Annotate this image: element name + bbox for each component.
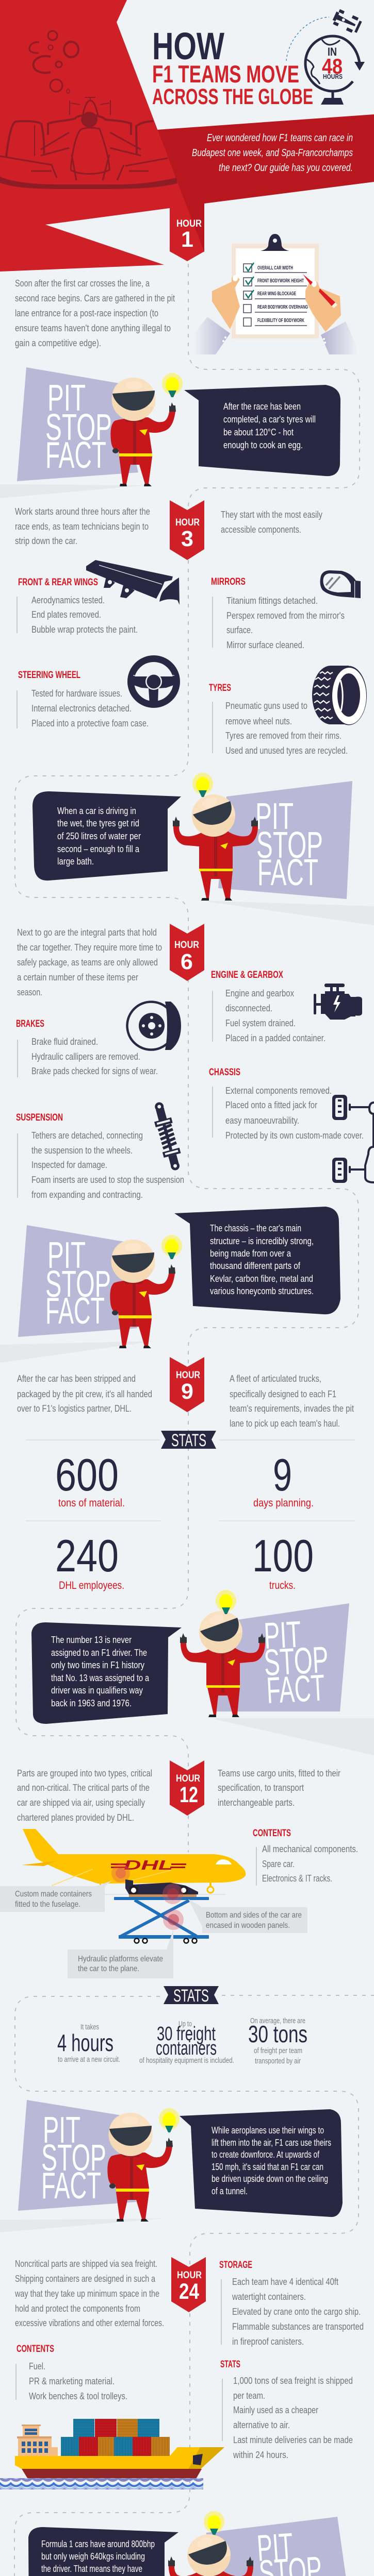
item: sea freight stats: alternative to air.	[233, 2419, 290, 2430]
item: suspension: SUSPENSION	[16, 1112, 63, 1123]
hour 6 badge	[170, 924, 204, 981]
item: chassis: Placed onto a fitted jack for	[225, 1099, 317, 1110]
hour 12 badge: 12	[180, 1783, 198, 1807]
hour 9 text left	[17, 1373, 152, 1414]
stat: 100 trucks: 100	[252, 1530, 314, 1581]
item: suspension	[16, 1112, 184, 1200]
item: storage: STORAGE	[219, 2260, 252, 2270]
hour 3 text left: Work starts around three hours after the	[15, 506, 150, 517]
hour 3 text right: accessible components.	[221, 524, 301, 535]
icon: mirror	[320, 570, 361, 598]
hour 12 text left: car are shipped via air, using specially	[17, 1797, 145, 1808]
item: engine and gearbox	[211, 970, 326, 1043]
hour 3 text right: They start with the most easily	[221, 509, 323, 520]
stat: 4 hours: It takes	[80, 2023, 99, 2031]
hour 1 text	[15, 278, 175, 348]
hour 1 label	[176, 218, 202, 252]
item: air cargo contents: CONTENTS	[253, 1828, 291, 1839]
stat: 30 tons: 30 tons	[248, 2021, 307, 2047]
item: sea freight stats: STATS	[220, 2359, 240, 2370]
icon: steering wheel	[131, 658, 176, 705]
hour 6 badge: HOUR	[174, 940, 199, 951]
item: storage: watertight containers.	[232, 2291, 306, 2302]
hour 6 text: season.	[17, 987, 42, 997]
hour 12 text left: and non-critical. The critical parts of the	[17, 1782, 150, 1793]
pit stop fact 6: the driver. That means they have	[41, 2564, 142, 2574]
item: brakes: Brake pads checked for signs of wear.	[31, 1065, 158, 1076]
pit stop fact 3: FACT	[45, 1291, 105, 1332]
item: front and rear wings: End plates removed.	[31, 609, 101, 620]
pit stop fact 1: STOP	[45, 407, 112, 448]
item: storage: in fireproof canisters.	[232, 2336, 304, 2347]
hour 1 label: 1	[181, 227, 193, 252]
hour 9 text left: over to F1's logistics partner, DHL.	[17, 1403, 132, 1414]
item: sea freight stats: per team.	[233, 2390, 265, 2401]
hour 6 badge: 6	[181, 950, 193, 974]
item: suspension: the suspension to the wheels.	[31, 1145, 133, 1156]
item: front and rear wings: Bubble wrap protects the paint.	[31, 624, 138, 635]
stat: 30 tons: of freight per team	[254, 2046, 302, 2055]
hour 12 text left: Parts are grouped into two types, critical	[17, 1768, 152, 1778]
hour 9 badge	[170, 1357, 204, 1412]
hour 12 badge: HOUR	[176, 1773, 200, 1784]
pit stop fact 2: STOP	[256, 825, 323, 866]
illustration: scrutineering clipboard held in hands: REAR BODYWORK OVERHANG	[257, 304, 308, 310]
hour 3 text left: strip down the car.	[15, 535, 77, 546]
pit stop fact 5: FACT	[41, 2165, 101, 2207]
pit stop fact 1: PIT	[47, 378, 86, 419]
item: front and rear wings: FRONT & REAR WINGS	[18, 577, 98, 588]
item: brakes: BRAKES	[16, 1019, 44, 1029]
pit stop fact 1: completed, a car's tyres will	[223, 414, 316, 425]
pit stop fact 5: to create downforce. At upwards of	[212, 2149, 320, 2160]
item: tyres: remove wheel nuts.	[225, 716, 292, 726]
stat: 30 freight containers: of hospitality equipment is included.	[139, 2056, 234, 2065]
hour 24 badge	[171, 2257, 206, 2312]
illustration: scrutineering clipboard held in hands: OVERALL CAR WIDTH	[257, 265, 293, 271]
item: sea freight stats	[220, 2359, 353, 2460]
pit stop fact 2: PIT	[255, 796, 294, 837]
item: sea freight stats: within 24 hours.	[233, 2449, 288, 2460]
stat: 30 tons: On average, there are	[250, 2016, 305, 2025]
hour 1 text: lane entrance for a post-race inspection (to	[15, 308, 158, 318]
item: steering wheel: Internal electronics detached.	[31, 703, 132, 714]
icon: globe with 48 hours: 48	[322, 54, 343, 78]
item: suspension: from expanding and contracting.	[31, 1189, 143, 1200]
item: suspension: Tethers are detached, connecting	[31, 1130, 143, 1141]
hour 12 text right	[218, 1768, 340, 1808]
hour 9 badge: 9	[181, 1379, 193, 1404]
pit stop fact 1	[0, 367, 340, 498]
pit stop fact 4: driver was in qualifiers way	[51, 1685, 143, 1696]
callout: wooden panels	[188, 1899, 307, 1933]
hour 12 text left	[17, 1768, 152, 1823]
hour 1 text: gain a competitive edge).	[15, 337, 101, 348]
callout: containers	[0, 1880, 112, 1912]
icon: suspension spring	[150, 1100, 185, 1173]
illustration: DHL cargo plane and scissor lift: DHL	[124, 1857, 173, 1873]
header: dark ribbon	[156, 114, 374, 252]
pit stop fact 2: When a car is driving in	[57, 806, 136, 816]
item: air cargo contents: Electronics & IT racks.	[262, 1873, 332, 1884]
pit stop fact 5: lift them into the air, F1 cars use theirs	[212, 2138, 331, 2148]
item: front and rear wings: Aerodynamics tested.	[31, 595, 105, 605]
stat: 30 tons	[248, 2016, 307, 2065]
hour 24 badge: HOUR	[177, 2270, 202, 2281]
hour 6 text: the car together. They require more time to	[17, 942, 162, 953]
stat: 30 tons: transported by air	[255, 2057, 301, 2065]
pit stop fact 6	[28, 2511, 374, 2576]
hour 3 badge: HOUR	[175, 517, 200, 528]
item: tyres	[209, 683, 348, 756]
item: chassis: External components removed.	[225, 1085, 332, 1096]
pit stop fact 5: STOP	[41, 2138, 106, 2179]
pit stop fact 3: Kevlar, carbon fibre, metal and	[210, 1274, 313, 1284]
hour 9 text right: specifically designed to each F1	[230, 1388, 336, 1399]
item: brakes: Hydraulic callipers are removed.	[31, 1051, 140, 1062]
hour 12 text right: Teams use cargo units, fitted to their	[218, 1768, 340, 1778]
pit stop fact 5	[0, 2100, 343, 2232]
hour 3 text left	[15, 506, 150, 546]
hour 9 text right	[230, 1373, 354, 1429]
stat: 9 days	[253, 1449, 314, 1509]
hour 9 badge: HOUR	[176, 1370, 200, 1381]
hour 24 text: excessive vibrations and other external forces.	[15, 2317, 164, 2328]
stat: 9 days: 9	[273, 1449, 292, 1500]
pit stop fact 1: FACT	[45, 435, 106, 476]
hour 1 text: second race begins. Cars are gathered in the pit	[15, 293, 175, 303]
stat: 600 tons: tons of material.	[58, 1497, 125, 1509]
pit stop fact 6: but only weigh 640kgs including	[41, 2551, 145, 2562]
item: engine and gearbox: Engine and gearbox	[225, 988, 295, 998]
pit stop fact 4: The number 13 is never	[51, 1635, 132, 1645]
callout: wooden panels: Bottom and sides of the car are	[206, 1911, 302, 1920]
hour 6 text: Next to go are the integral parts that hold	[17, 927, 157, 938]
illustration: scrutineering clipboard held in hands	[193, 234, 358, 354]
icon: wing	[86, 560, 180, 605]
stat: 4 hours: to arrive at a new circuit.	[58, 2055, 120, 2064]
pit stop fact 1: enough to cook an egg.	[223, 440, 303, 450]
pit stop fact 2: large bath.	[57, 856, 94, 867]
pit stop fact 3: PIT	[47, 1235, 86, 1276]
item: sea cargo contents	[15, 2344, 127, 2401]
pit stop fact 1: After the race has been	[223, 401, 301, 412]
hour 12 text right: specification, to transport	[218, 1782, 304, 1793]
icon: F1 car silhouette with smoke bubbles	[0, 31, 177, 189]
hour 24 text: way that they take up minimum space in the	[14, 2288, 159, 2299]
stat: 4 hours: 4 hours	[57, 2029, 113, 2056]
hour 6 text: safely package, as teams are only allowed	[17, 957, 158, 968]
hour 24 badge: 24	[179, 2279, 199, 2304]
header: red panel with hour 1 badge	[0, 0, 204, 272]
hour 3 badge	[170, 500, 204, 560]
pit stop fact 3	[0, 1207, 340, 1363]
item: sea cargo contents: CONTENTS	[17, 2344, 54, 2354]
stat: 9 days: days planning.	[253, 1497, 314, 1509]
item: steering wheel	[17, 670, 149, 728]
pit stop fact 4: that No. 13 was assigned to a	[51, 1673, 150, 1683]
icon: engine	[314, 984, 362, 1020]
stat: 240 employees: 240	[55, 1530, 119, 1581]
item: suspension: Inspected for damage.	[31, 1159, 107, 1170]
hour 3 text right	[221, 509, 323, 535]
icon: globe with 48 hours: IN	[328, 45, 337, 58]
pit stop fact 5: While aeroplanes use their wings to	[212, 2125, 324, 2136]
icon: brake disc	[127, 1002, 181, 1050]
item: brakes	[16, 1019, 158, 1077]
item: air cargo contents	[253, 1828, 358, 1886]
item: steering wheel: STEERING WHEEL	[18, 670, 80, 681]
item: tyres: Tyres are removed from their rims.	[225, 730, 342, 741]
icon: globe with 48 hours: HOURS	[323, 73, 343, 80]
hour 3 badge: 3	[181, 527, 193, 551]
callout: containers: fitted to the fuselage.	[15, 1900, 80, 1909]
icon: tyre	[312, 666, 367, 725]
item: chassis	[209, 1067, 364, 1141]
callout: wooden panels: encased in wooden panels.	[206, 1921, 290, 1930]
hour 9 text left: After the car has been stripped and	[17, 1373, 136, 1384]
illustration: container ship side view	[0, 2419, 224, 2489]
hour 24 text: hold and protect the components from	[15, 2303, 140, 2314]
title: HOW	[152, 25, 224, 67]
item: tyres: TYRES	[209, 683, 231, 693]
stat: 30 freight containers: 30 freight	[157, 2023, 216, 2045]
item: steering wheel: Placed into a protective foam case.	[31, 718, 149, 728]
item: mirrors	[211, 577, 345, 650]
hour 1 label: HOUR	[176, 218, 202, 229]
pit stop fact 2: FACT	[257, 852, 318, 893]
pit stop fact 3: thousand different parts of	[210, 1261, 301, 1271]
stat: 30 freight containers	[139, 2020, 234, 2065]
pit stop fact 3: structure – is incredibly strong,	[210, 1236, 314, 1246]
item: chassis: easy manoeuvrability.	[225, 1115, 299, 1126]
hour 9 text right: A fleet of articulated trucks,	[230, 1373, 321, 1384]
stat: 100 trucks	[252, 1530, 314, 1591]
pit stop fact 6: Formula 1 cars have around 800bhp	[41, 2539, 155, 2549]
pit stop fact 5: PIT	[43, 2110, 80, 2151]
pit stop fact 6: PIT	[256, 2526, 295, 2569]
item: mirrors: surface.	[226, 624, 253, 635]
pit stop fact 4: STOP	[263, 1639, 330, 1684]
item: mirrors: Mirror surface cleaned.	[226, 639, 304, 650]
stat: 600 tons: 600	[55, 1449, 119, 1500]
pit stop fact 4: PIT	[263, 1614, 302, 1657]
callout: hydraulic platforms: the car to the plane.	[78, 1964, 139, 1973]
callout: hydraulic platforms	[68, 1929, 173, 1978]
hour 12 badge	[170, 1760, 204, 1816]
icon: top-down F1 car	[331, 8, 363, 35]
pit stop fact 4: only two times in F1 history	[51, 1660, 144, 1670]
stat: 240 employees: DHL employees.	[59, 1580, 124, 1591]
pit stop fact 3: various honeycomb structures.	[210, 1286, 314, 1296]
title	[152, 25, 313, 109]
item: air cargo contents: Spare car.	[262, 1858, 295, 1869]
title: F1 TEAMS MOVE	[152, 60, 299, 88]
pit stop fact 4: back in 1963 and 1976.	[51, 1698, 132, 1708]
item: mirrors: Perspex removed from the mirror's	[226, 610, 345, 621]
hour 1 text: Soon after the first car crosses the line, a	[15, 278, 150, 289]
item: engine and gearbox: disconnected.	[225, 1003, 272, 1013]
pit stop fact 4	[31, 1590, 374, 1755]
pit stop fact 3: being made from over a	[210, 1248, 291, 1259]
pit stop fact 4: assigned to an F1 driver. The	[51, 1648, 147, 1658]
item: mirrors: MIRRORS	[211, 577, 246, 587]
hour 24 text: Shipping containers are designed in such a	[15, 2273, 156, 2284]
hour 12 text right: interchangeable parts.	[218, 1797, 295, 1808]
intro text	[192, 132, 353, 174]
pit stop fact 4: FACT	[266, 1667, 326, 1711]
item: mirrors: Titanium fittings detached.	[226, 595, 318, 606]
pit stop fact 5: 150 mph, it's said that an F1 car can	[212, 2162, 323, 2172]
callout: hydraulic platforms: Hydraulic platforms elevate	[78, 1955, 163, 1963]
pit stop fact 2: the wet, the tyres get rid	[57, 818, 139, 828]
item: steering wheel: Tested for hardware issues.	[31, 688, 122, 699]
hour 12 text left: chartered planes provided by DHL.	[17, 1812, 134, 1823]
pit stop fact 5: be driven upside down on the ceiling	[212, 2174, 328, 2184]
pit stop fact 2: of 250 litres of water per	[57, 831, 141, 841]
hour 3 text left: race ends, as team technicians begin to	[15, 521, 149, 532]
item: sea freight stats: Mainly used as a cheaper	[233, 2404, 318, 2415]
stat: 4 hours	[57, 2023, 120, 2064]
pit stop fact 3: The chassis – the car's main	[210, 1223, 301, 1233]
illustration: DHL cargo plane and scissor lift	[22, 1829, 246, 1943]
hour 24 text: Noncritical parts are shipped via sea freight.	[15, 2258, 157, 2269]
stat: 100 trucks: trucks.	[269, 1580, 296, 1591]
illustration: scrutineering clipboard held in hands: REAR WING BLOCKAGE	[257, 291, 296, 297]
stats ribbon 1: STATS	[171, 1431, 206, 1450]
item: suspension: Foam inserts are used to stop the suspension	[31, 1174, 184, 1185]
pit stop fact 2	[32, 773, 374, 925]
hour 24 text	[14, 2258, 164, 2328]
item: chassis: CHASSIS	[209, 1067, 240, 1078]
pit stop fact 1: be about 120°C - hot	[223, 427, 294, 437]
item: sea cargo contents: Work benches & tool trolleys.	[29, 2391, 127, 2401]
stats ribbon 1	[161, 1431, 216, 1450]
pit stop fact 3: STOP	[45, 1264, 111, 1305]
pit stop fact 5: of a tunnel.	[212, 2186, 248, 2196]
callout: containers: Custom made containers	[15, 1890, 92, 1899]
item: front and rear wings	[17, 577, 138, 635]
hour 9 text left: packaged by the pit crew, it's all handed	[17, 1388, 152, 1399]
item: tyres: Pneumatic guns used to	[225, 700, 307, 711]
item: sea cargo contents: Fuel.	[29, 2361, 45, 2371]
stat: 30 freight containers: Up to	[178, 2020, 192, 2028]
item: engine and gearbox: ENGINE & GEARBOX	[211, 970, 283, 980]
item: engine and gearbox: Placed in a padded container.	[225, 1032, 326, 1043]
item: storage: Each team have 4 identical 40ft	[232, 2276, 338, 2287]
illustration: scrutineering clipboard held in hands: FRONT BODYWORK HEIGHT	[257, 278, 304, 284]
icon: globe with 48 hours	[286, 17, 365, 105]
hour 6 text	[17, 927, 162, 997]
item: storage	[219, 2260, 364, 2347]
pit stop fact 2: second – enough to fill a	[57, 844, 140, 854]
stats ribbon 2: STATS	[173, 1986, 209, 2006]
hour 1 text: ensure teams haven't done anything illegal to	[15, 323, 171, 333]
stat: 30 freight containers: containers	[156, 2038, 217, 2059]
hour 9 text right: lane to pick up each team's haul.	[230, 1418, 340, 1429]
item: engine and gearbox: Fuel system drained.	[225, 1018, 296, 1028]
illustration: scrutineering clipboard held in hands: FLEXIBILITY OF BODYWORK	[257, 317, 304, 324]
hour 6 text: a certain number of these items per	[17, 972, 138, 982]
item: brakes: Brake fluid drained.	[31, 1036, 98, 1047]
item: sea cargo contents: PR & marketing material.	[29, 2376, 115, 2386]
icon: chassis	[332, 1095, 374, 1183]
